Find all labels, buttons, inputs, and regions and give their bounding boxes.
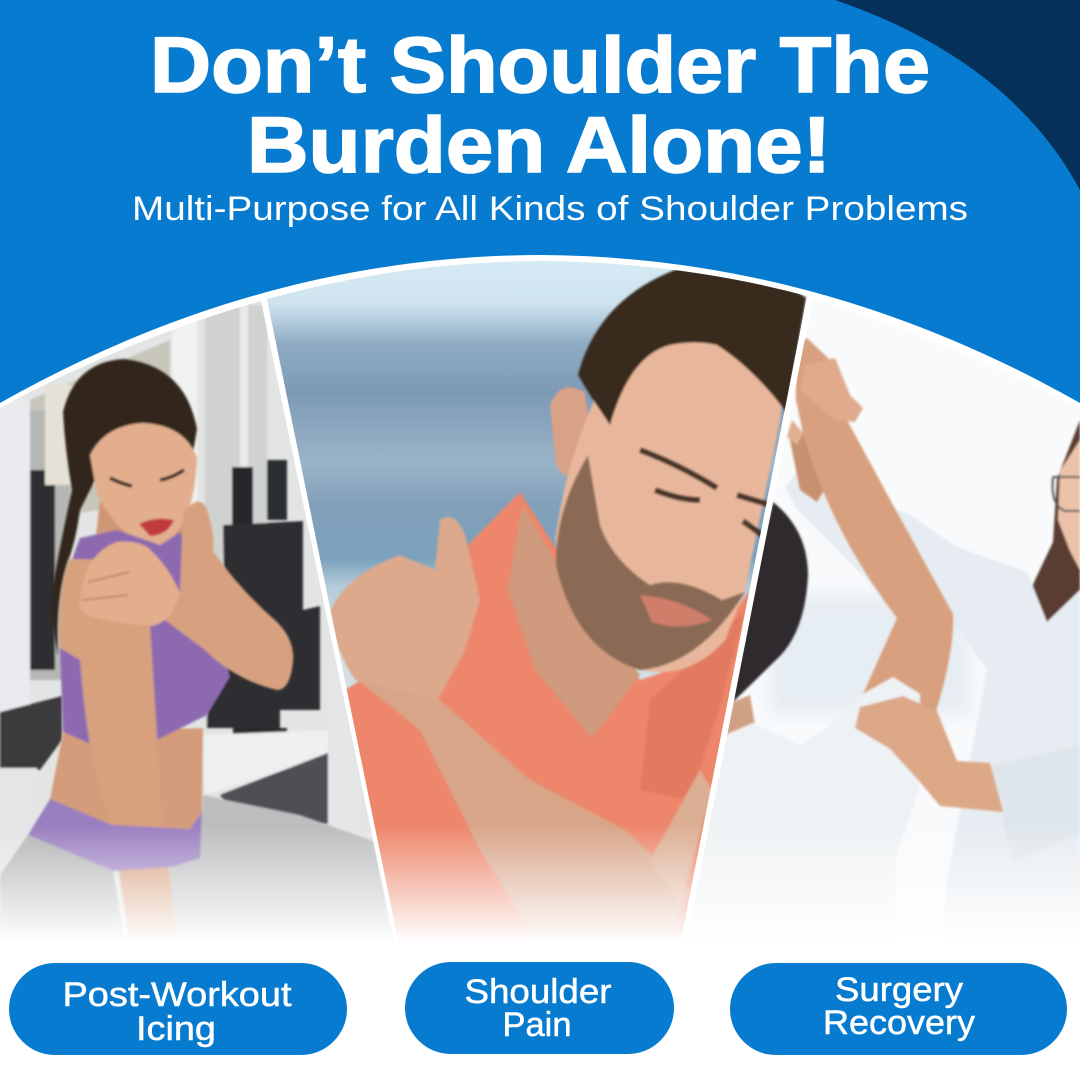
face [1058, 440, 1080, 570]
panel: surgery recovery photo [699, 336, 1080, 904]
ear [550, 387, 592, 477]
raised arm [795, 338, 953, 715]
dark navy corner [835, 0, 1080, 190]
title: Don’t Shoulder The [150, 20, 930, 109]
label: post-workout icing [9, 963, 347, 1055]
neck [723, 695, 755, 738]
waistband [28, 799, 202, 871]
hand [80, 542, 180, 626]
lips [640, 595, 712, 627]
title: Burden Alone! [247, 100, 831, 189]
brows and eyes [640, 450, 770, 535]
hair [1027, 420, 1080, 622]
leggings front [0, 834, 120, 923]
panel: shoulder pain photo [260, 255, 820, 945]
man [330, 268, 806, 945]
hair and braid [52, 359, 197, 656]
crossing arm [165, 502, 293, 690]
patient [708, 337, 1004, 836]
near arm [60, 559, 178, 945]
label: surgery recovery: Surgery [835, 971, 963, 1009]
doctor [786, 420, 1080, 890]
shirt [345, 492, 750, 945]
face [90, 423, 197, 547]
blue header background [0, 0, 1080, 403]
gripping fingers [800, 358, 863, 422]
label: shoulder pain: Pain [502, 1006, 572, 1044]
photo bottom fade [0, 825, 1080, 943]
hair [578, 268, 806, 425]
doctor hand on shoulder [855, 696, 1003, 812]
closed eyes [110, 470, 184, 486]
neck and chest [95, 500, 184, 537]
label: shoulder pain [405, 962, 674, 1054]
glasses [1052, 477, 1080, 511]
neck [508, 505, 640, 738]
label: surgery recovery: Recovery [823, 1004, 975, 1042]
finger lines [82, 572, 130, 600]
purple top [60, 530, 230, 745]
label: shoulder pain: Shoulder [464, 973, 612, 1011]
hand on shoulder [330, 517, 480, 705]
white coat sleeve and body [786, 474, 1080, 890]
white shirt [680, 677, 920, 945]
face [555, 335, 790, 672]
label: surgery recovery [730, 963, 1067, 1055]
coat lower panel [990, 745, 1080, 862]
forearm [362, 682, 689, 912]
dark hair [733, 502, 808, 702]
thumb [787, 420, 803, 445]
other arm [652, 770, 711, 885]
blurred clinic background [770, 595, 970, 715]
far forearm [790, 433, 830, 502]
woman [0, 359, 395, 945]
leggings back [150, 795, 395, 945]
beard [556, 455, 745, 670]
lips [139, 519, 174, 536]
label: post-workout icing: Post-Workout [62, 976, 292, 1014]
panel: post-workout icing photo [0, 290, 400, 950]
subtitle: Multi-Purpose for All Kinds of Shoulder Problems [132, 190, 968, 228]
label: post-workout icing: Icing [136, 1010, 216, 1048]
title [150, 20, 930, 189]
gym machine background [0, 305, 360, 833]
torso [50, 728, 203, 830]
